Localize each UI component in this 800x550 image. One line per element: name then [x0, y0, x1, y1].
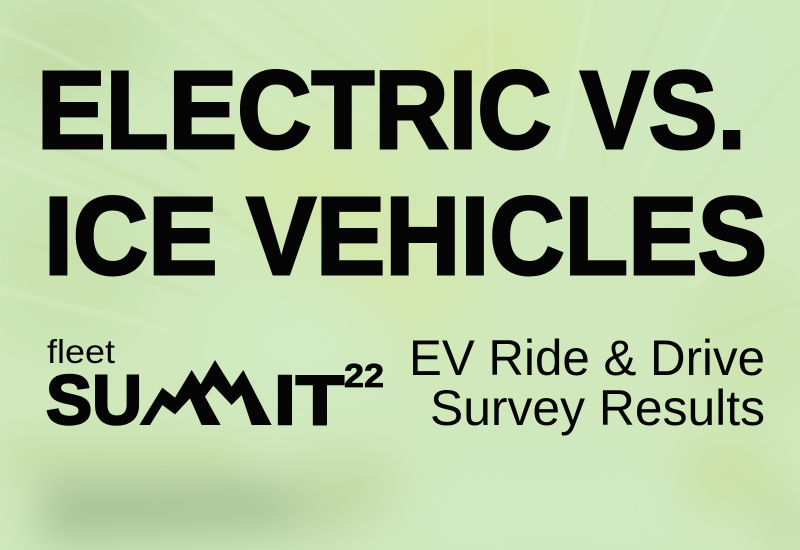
subtitle: EV Ride & Drive [409, 330, 765, 386]
subtitle [409, 330, 765, 436]
title: ELECTRIC VS. [37, 49, 746, 172]
title [37, 49, 767, 298]
fine streaks radiating from the vanishing point [0, 0, 800, 340]
subtitle: Survey Results [430, 380, 765, 436]
logo: fleet summit 22: IT [274, 361, 344, 439]
title: ICE VEHICLES [44, 175, 767, 298]
logo: fleet summit 22 [46, 333, 384, 439]
logo: fleet summit 22: SU [46, 361, 142, 439]
icon: mountain peaks forming MM [139, 360, 272, 425]
logo: fleet summit 22: 22 [344, 357, 384, 394]
logo: fleet summit 22: fleet [47, 333, 115, 370]
